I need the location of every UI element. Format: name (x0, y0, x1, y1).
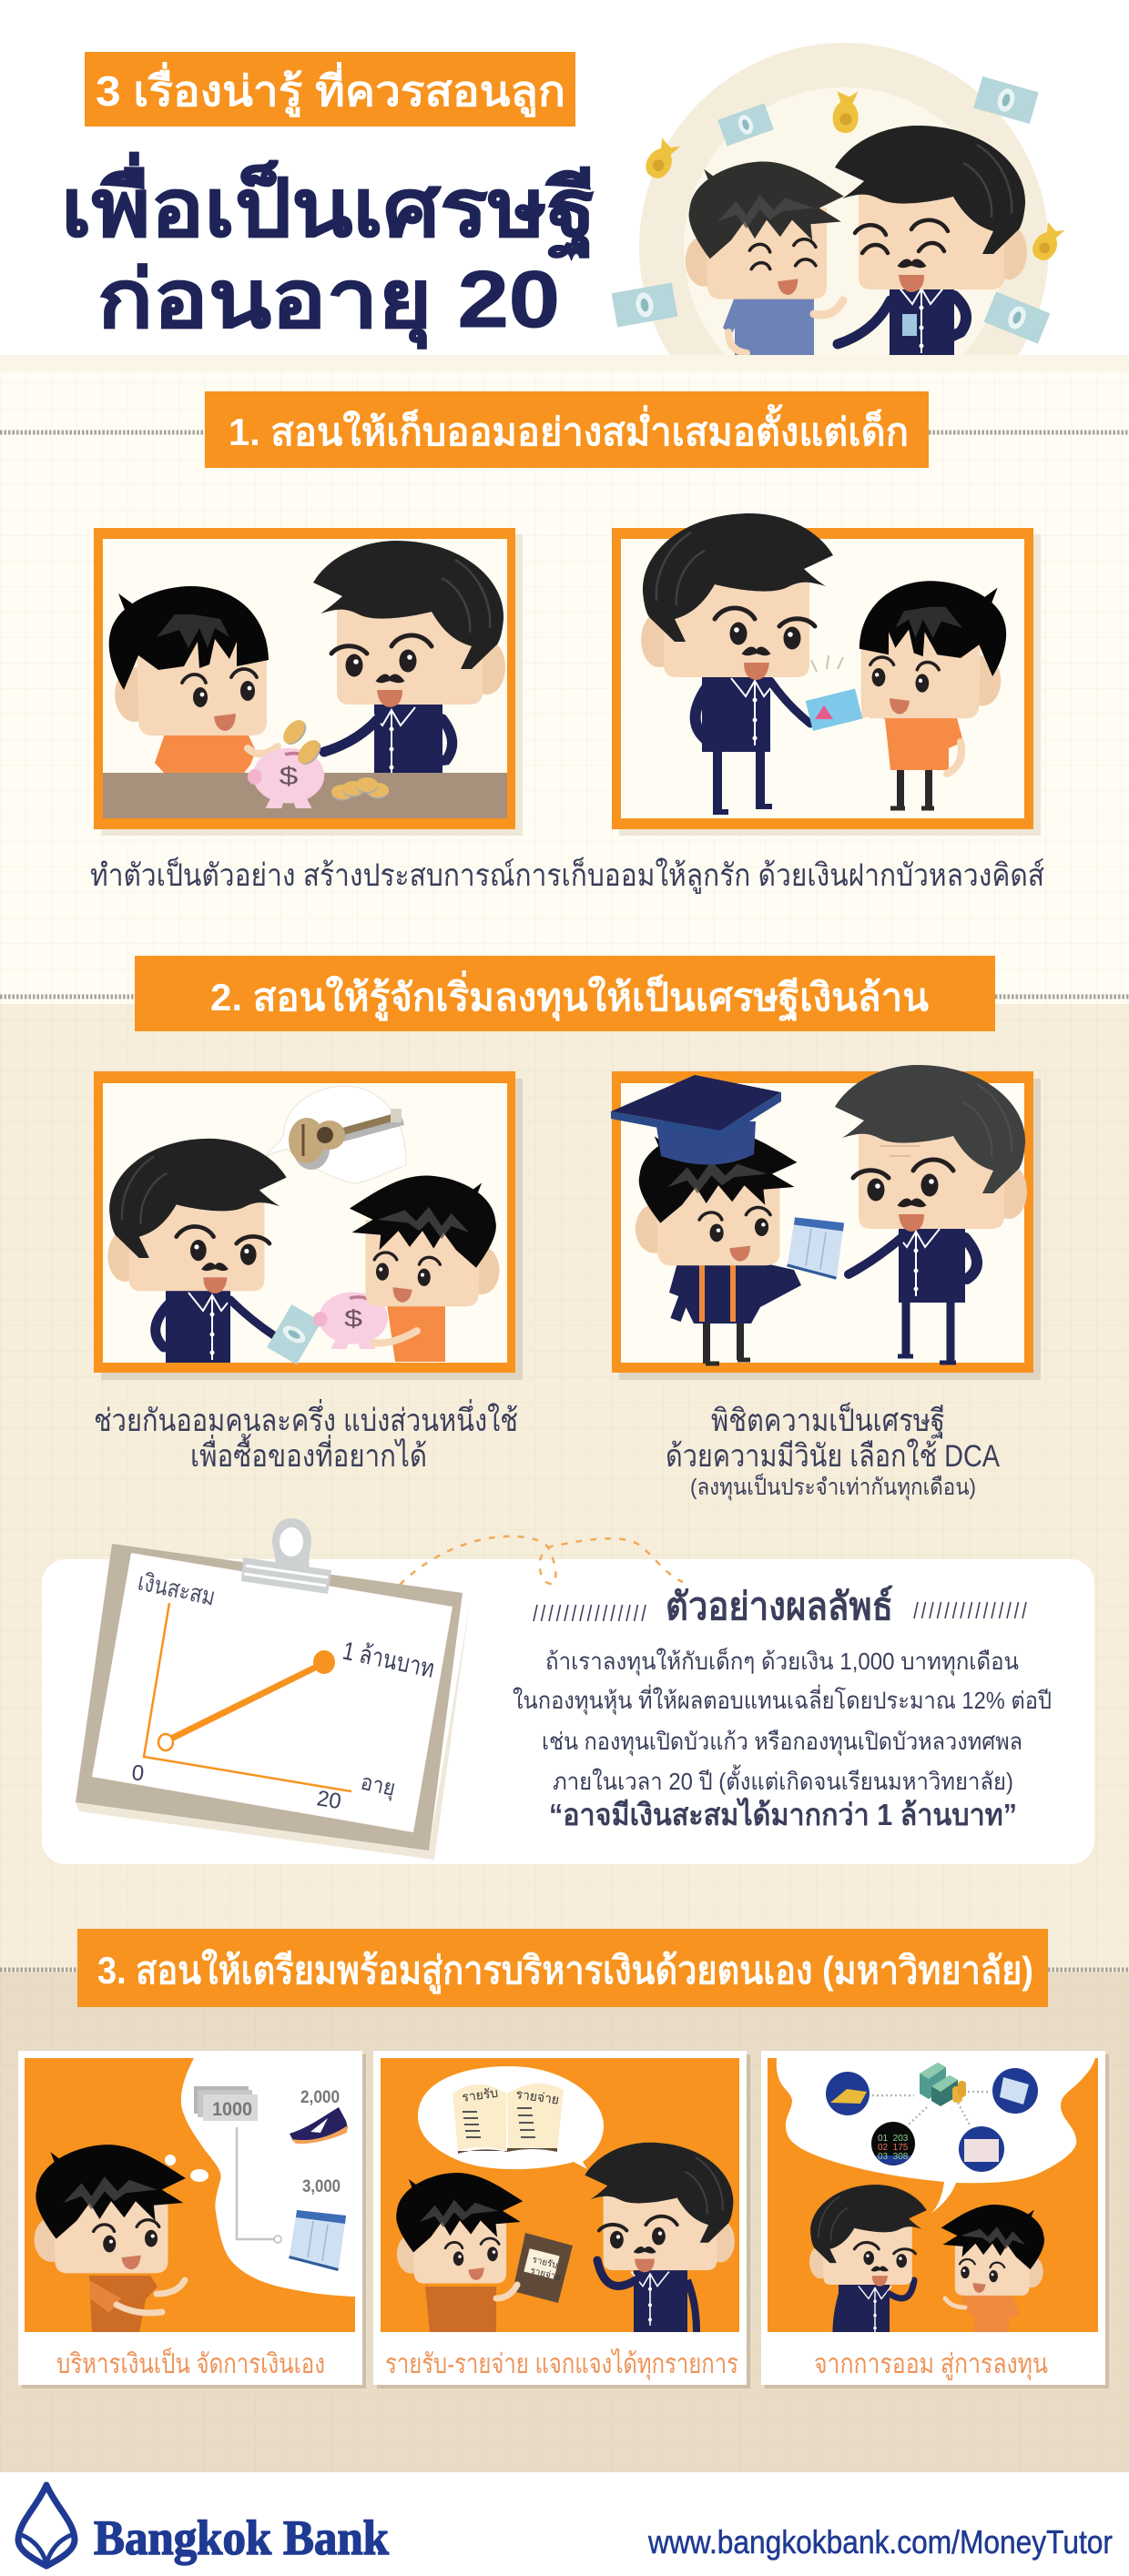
panel: graduate with DCA passbook (611, 1065, 1041, 1380)
card: from saving to investing (761, 2051, 1109, 2388)
card: income and expense (373, 2051, 750, 2388)
panel: example result (42, 1518, 1094, 1864)
card: income and expense: รายรับ-รายจ่าย แจกแจงได้ทุกรายการ (385, 2348, 738, 2381)
card: managing own money: 3,000 (302, 2177, 341, 2196)
panel: dad giving savings card to son (612, 513, 1041, 836)
section 1 heading: 1. สอนให้เก็บออมอย่างสม่ำเสมอตั้งแต่เด็ก (229, 403, 909, 453)
result text: ถ้าเราลงทุนให้กับเด็กๆ ด้วยเงิน 1,000 บาททุกเดือน (545, 1647, 1019, 1676)
card: income and expense: รายรับ (461, 2085, 499, 2104)
card: from saving to investing: จากการออม สู่การลงทุน (814, 2349, 1048, 2381)
card: income and expense: รายรับ (531, 2255, 559, 2271)
card: managing own money: 1000 (212, 2099, 252, 2120)
section 1 heading (0, 391, 1129, 468)
caption: split saving: ช่วยกันออมคนละครึ่ง แบ่งส่วนหนึ่งใช้ (94, 1399, 518, 1438)
panel: dad and son with piggy bank (94, 528, 523, 836)
section 3 heading: 3. สอนให้เตรียมพร้อมสู่การบริหารเงินด้วยตนเอง (มหาวิทยาลัย) (97, 1948, 1033, 1994)
caption: DCA: ด้วยความมีวินัย เลือกใช้ DCA (666, 1438, 1000, 1474)
brand name: Bangkok Bank (94, 2510, 389, 2565)
caption: split saving: เพื่อซื้อของที่อยากได้ (190, 1434, 427, 1474)
result text: ภายในเวลา 20 ปี (ตั้งแต่เกิดจนเรียนมหาวิทยาลัย) (553, 1764, 1013, 1795)
header illustration: father and son with money (612, 43, 1065, 355)
clipboard chart: เงินสะสม (136, 1568, 218, 1611)
card: from saving to investing: 01 203 (878, 2134, 909, 2144)
card: from saving to investing: 02 175 (878, 2143, 909, 2153)
icon: Bangkok Bank lotus logo (18, 2485, 75, 2566)
card: managing own money (18, 2051, 366, 2388)
panel: saving half each for a guitar (94, 1071, 523, 1380)
thought bubble with guitar (266, 1086, 406, 1183)
main title (61, 152, 596, 350)
main title: ก่อนอายุ 20 (97, 254, 560, 350)
card: managing own money: บริหารเงินเป็น จัดการเงินเอง (56, 2347, 325, 2379)
result text: ในกองทุนหุ้น ที่ให้ผลตอบแทนเฉลี่ยโดยประมาณ 12% ต่อปี (513, 1684, 1052, 1715)
clipboard chart (76, 1518, 470, 1860)
card: managing own money: 2,000 (300, 2088, 340, 2107)
card: income and expense: รายจ่าย (529, 2266, 562, 2283)
title tag (85, 52, 575, 127)
caption: DCA: (ลงทุนเป็นประจำเท่ากันทุกเดือน) (690, 1473, 976, 1501)
clipboard chart: 20 (315, 1786, 343, 1814)
caption: split saving (94, 1399, 518, 1474)
card: from saving to investing: 03 308 (878, 2152, 909, 2162)
caption: DCA: พิชิตความเป็นเศรษฐี (711, 1402, 945, 1439)
title tag: 3 เรื่องน่ารู้ ที่ควรสอนลูก (96, 62, 565, 117)
dashed flourish (400, 1536, 683, 1585)
result text (513, 1647, 1052, 1831)
result text: “อาจมีเงินสะสมได้มากกว่า 1 ล้านบาท” (549, 1797, 1017, 1831)
section 3 heading (0, 1929, 1129, 2007)
clipboard chart: 0 (130, 1760, 145, 1786)
section 2 heading (0, 956, 1129, 1031)
clipboard chart: อายุ (359, 1770, 398, 1802)
section 2 heading: 2. สอนให้รู้จักเริ่มลงทุนให้เป็นเศรษฐีเงินล้าน (210, 970, 929, 1022)
result heading: ตัวอย่างผลลัพธ์ (666, 1585, 893, 1628)
main title: เพื่อเป็นเศรษฐี (61, 152, 596, 260)
result text: เช่น กองทุนเปิดบัวแก้ว หรือกองทุนเปิดบัวหลวงทศพล (542, 1728, 1022, 1756)
result heading (534, 1585, 1026, 1628)
icon: stacked banknotes and coins (920, 2063, 966, 2106)
clipboard chart: 1 ล้านบาท (341, 1637, 437, 1683)
caption: DCA (666, 1402, 1000, 1501)
card: income and expense: รายจ่าย (515, 2086, 560, 2107)
